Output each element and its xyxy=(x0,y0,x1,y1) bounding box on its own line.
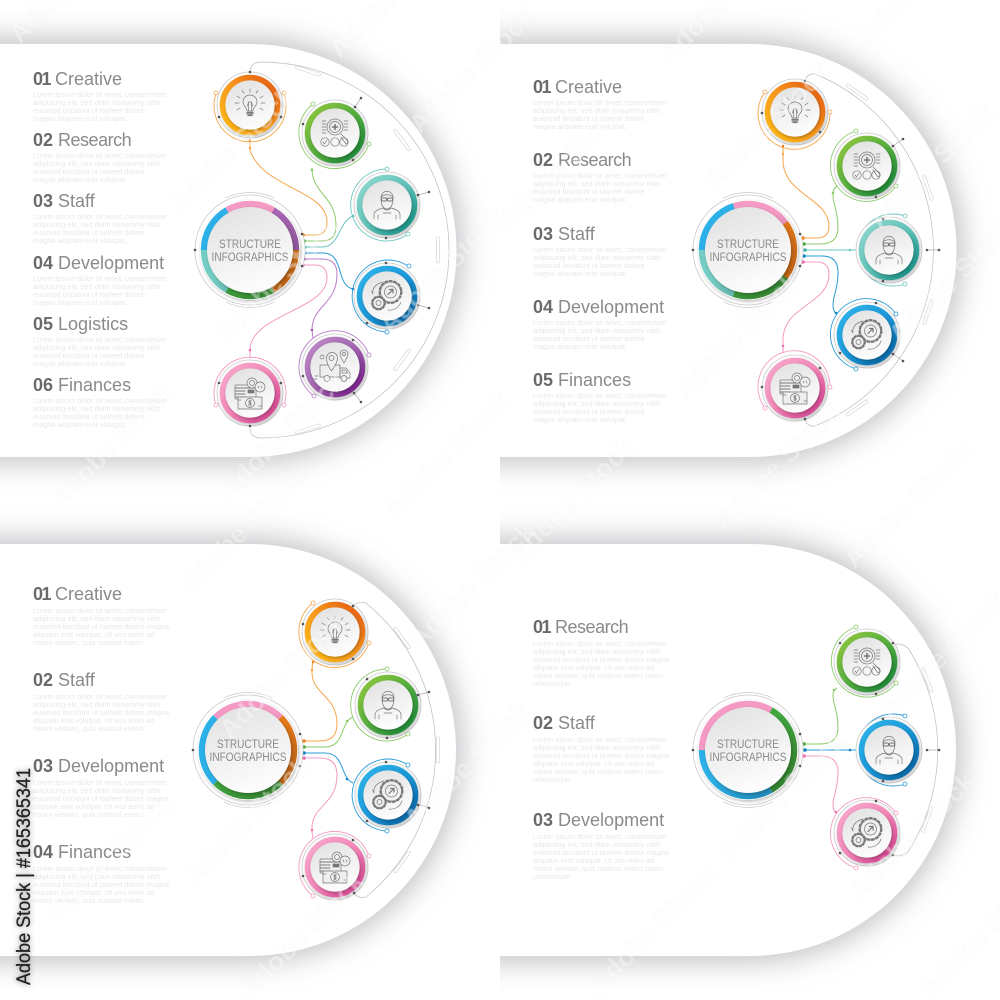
text: 02 Research: euismod tincidunt ut laoreet dolore xyxy=(33,167,145,176)
text: 03 Staff: 03 Staff xyxy=(33,191,96,211)
connector: purple xyxy=(302,257,337,338)
connector: blue xyxy=(803,748,860,752)
watermark: Adobe Stock repeats: Adobe Stock xyxy=(713,726,852,864)
text: 02 Research: adipiscing elit, sed diam nonummy nibh xyxy=(33,159,160,168)
text: 01 Research: euismod tincidunt ut laoreet dolore magna xyxy=(533,655,670,664)
text: 04 Finances: 04 Finances xyxy=(33,842,131,862)
hub: INFOGRAPHICS xyxy=(710,751,786,764)
text: 02 Research xyxy=(33,130,167,184)
text: 06 Finances: magna aliquam erat volutpat. xyxy=(33,420,127,429)
text: 04 Development: euismod tincidunt ut laoreet dolore xyxy=(33,290,145,299)
text: 01 Research: minim veniam, quis nostrud exerci tation xyxy=(533,671,663,680)
connector: green xyxy=(802,688,838,746)
node: Finances xyxy=(214,357,286,427)
hub xyxy=(174,174,326,326)
text: 02 Staff: 02 Staff xyxy=(33,670,96,690)
text: 03 Development xyxy=(33,756,170,819)
connector: blue xyxy=(802,254,838,314)
text: 01 Research: adipiscing elit, sed diam nonummy nibh xyxy=(533,647,660,656)
text: 01 Creative: magna aliquam erat volutpat. xyxy=(33,114,127,123)
outer arc with links xyxy=(805,74,940,426)
text: 05 Finances: magna aliquam erat volutpat. xyxy=(533,415,627,424)
watermark: Adobe Stock repeats: Adobe Stock xyxy=(173,461,312,599)
text: 03 Staff: adipiscing elit, sed diam nonummy nibh xyxy=(533,253,660,262)
text: 02 Staff: Lorem ipsum dolor sit amet, consectetuer xyxy=(533,735,667,744)
text: 05 Logistics: 05 Logistics xyxy=(33,314,128,334)
text: 01 Creative: 01 Creative xyxy=(533,77,622,97)
text: 01 Creative: euismod tincidunt ut laoreet dolore magna xyxy=(33,622,170,631)
text: 01 Creative: 01 Creative xyxy=(33,584,122,604)
text: 01 Creative: adipiscing elit, sed diam nonummy nibh xyxy=(33,98,160,107)
text: 02 Research: Lorem ipsum dolor sit amet, consectetuer xyxy=(33,151,167,160)
text: 03 Staff: Lorem ipsum dolor sit amet, consectetuer xyxy=(533,245,667,254)
connector: pink xyxy=(249,263,327,358)
text: 03 Development: adipiscing elit, sed diam nonummy nibh xyxy=(533,840,660,849)
text: 06 Finances: Lorem ipsum dolor sit amet, consectetuer xyxy=(33,396,167,405)
watermark: Adobe Stock repeats: Adobe Stock xyxy=(493,96,632,234)
panel: five-step infographic xyxy=(533,74,940,426)
text: 05 Logistics xyxy=(33,314,167,368)
text: 04 Development xyxy=(33,253,167,307)
text: 04 Development: magna aliquam erat volutpat. xyxy=(533,342,627,351)
text: 01 Creative xyxy=(533,77,667,131)
text: 01 Creative: euismod tincidunt ut laoreet dolore xyxy=(33,106,145,115)
node: Development xyxy=(352,260,420,334)
text: 02 Research: 02 Research xyxy=(533,150,631,170)
text: 02 Staff: minim veniam, quis nostrud exerci xyxy=(33,724,144,733)
hub: INFOGRAPHICS xyxy=(210,751,286,764)
text: 01 Creative: 01 Creative xyxy=(33,69,122,89)
outer arc with links xyxy=(250,62,449,438)
text: 05 Finances: euismod tincidunt ut laoreet dolore xyxy=(533,407,645,416)
text: 04 Development: Lorem ipsum dolor sit amet, consectetuer xyxy=(33,274,167,283)
watermark: Adobe Stock repeats: Adobe Stock xyxy=(708,396,847,534)
panel background: top-right xyxy=(500,23,977,478)
connector: blue xyxy=(302,751,353,783)
watermark: Adobe Stock repeats: Adobe Stock xyxy=(403,516,542,654)
text: 05 Logistics: magna aliquam erat volutpat. xyxy=(33,359,127,368)
connector: green xyxy=(302,717,353,749)
text: 04 Finances: minim veniam, quis nostrud exerci xyxy=(33,896,144,905)
connector: blue xyxy=(303,251,354,290)
text: 03 Staff: euismod tincidunt ut laoreet dolore xyxy=(533,261,645,270)
text: 03 Development: Lorem ipsum dolor sit amet, consectetuer xyxy=(533,832,667,841)
watermark: Adobe Stock repeats: Adobe Stock xyxy=(38,791,177,929)
panel background: bottom-left xyxy=(0,523,476,977)
text: 04 Development: 04 Development xyxy=(33,253,164,273)
text: 01 Creative: Lorem ipsum dolor sit amet, consectetuer xyxy=(533,98,667,107)
connector: green xyxy=(802,186,838,246)
node: Logistics xyxy=(299,331,371,400)
text: 01 Research: aliquam erat volutpat. Ut wisi enim ad xyxy=(533,663,654,672)
text: 01 Creative: Lorem ipsum dolor sit amet, consectetuer xyxy=(33,606,167,615)
node: Creative xyxy=(299,599,371,668)
outer arc with links xyxy=(893,644,940,856)
text: 02 Staff: euismod tincidunt ut laoreet dolore magna xyxy=(533,751,670,760)
text: 03 Development: minim veniam, quis nostrud exerci tation xyxy=(533,864,663,873)
text: 03 Development: euismod tincidunt ut laoreet dolore magna xyxy=(533,848,670,857)
hub xyxy=(672,174,824,326)
text: 05 Logistics: euismod tincidunt ut laoreet dolore xyxy=(33,351,145,360)
node: Development xyxy=(830,299,900,371)
text: 05 Finances: adipiscing elit, sed diam nonummy nibh xyxy=(533,399,660,408)
watermark: Adobe Stock repeats: Adobe Stock xyxy=(378,386,517,524)
connector: orange xyxy=(782,146,829,240)
connector: green xyxy=(302,168,336,243)
text: 02 Staff: minim veniam, quis nostrud exerci tation xyxy=(533,767,663,776)
text: 04 Finances xyxy=(33,842,170,905)
text: 01 Research: Lorem ipsum dolor sit amet, consectetuer xyxy=(533,639,667,648)
text: 02 Staff: aliquam erat volutpat. Ut wisi enim ad xyxy=(33,716,154,725)
node: Staff xyxy=(856,214,928,286)
text: 02 Research: Lorem ipsum dolor sit amet, consectetuer xyxy=(533,171,667,180)
text: 03 Staff xyxy=(33,191,167,245)
text: 04 Finances: aliquam erat volutpat. Ut wisi enim ad xyxy=(33,888,154,897)
node: Staff xyxy=(351,667,421,741)
text: 02 Research: magna aliquam erat volutpat. xyxy=(533,195,627,204)
text: 02 Research xyxy=(533,150,667,204)
text: 02 Staff: ullamcorper xyxy=(533,775,572,784)
hub: STRUCTURE xyxy=(217,738,279,751)
hub xyxy=(172,674,324,826)
text: 03 Development: aliquam erat volutpat. Ut wisi enim ad xyxy=(33,802,154,811)
text: 04 Finances: Lorem ipsum dolor sit amet, consectetuer xyxy=(33,864,167,873)
watermark: Adobe Stock repeats: Adobe Stock xyxy=(668,266,807,404)
text: 05 Logistics: adipiscing elit, sed diam nonummy nibh xyxy=(33,343,160,352)
panel background: top-left xyxy=(0,23,477,478)
text: 01 Creative: minim veniam, quis nostrud exerci xyxy=(33,638,144,647)
panel: four-step infographic xyxy=(33,584,440,905)
text: 01 Research: ullamcorper xyxy=(533,679,572,688)
text: 03 Development: Lorem ipsum dolor sit amet, consectetuer xyxy=(33,778,167,787)
text: 01 Creative: magna aliquam erat volutpat. xyxy=(533,122,627,131)
text: 01 Creative: adipiscing elit, sed diam nonummy nibh xyxy=(533,106,660,115)
text: 04 Finances: adipiscing elit, sed diam nonummy nibh xyxy=(33,872,160,881)
text: 05 Logistics: Lorem ipsum dolor sit amet, consectetuer xyxy=(33,335,167,344)
node: Development xyxy=(352,759,421,833)
text: 03 Staff: euismod tincidunt ut laoreet dolore xyxy=(33,228,145,237)
hub: STRUCTURE xyxy=(717,238,779,251)
connector: orange xyxy=(302,662,337,743)
watermark: Adobe Stock repeats: Adobe Stock xyxy=(208,211,347,349)
text: 01 Creative xyxy=(33,584,170,647)
hub: INFOGRAPHICS xyxy=(212,251,288,264)
node: Staff xyxy=(856,714,928,786)
node: Finances xyxy=(758,351,832,421)
text: 03 Staff: magna aliquam erat volutpat. xyxy=(33,236,127,245)
text: 01 Creative: euismod tincidunt ut laoreet dolore xyxy=(533,114,645,123)
watermark: Adobe Stock repeats: Adobe Stock xyxy=(178,751,317,889)
text: 02 Research: euismod tincidunt ut laoreet dolore xyxy=(533,187,645,196)
watermark: Adobe Stock repeats: Adobe Stock xyxy=(838,436,977,574)
node: Staff xyxy=(351,167,420,241)
watermark: Adobe Stock repeats: Adobe Stock xyxy=(43,376,182,514)
text: 05 Finances: Lorem ipsum dolor sit amet, consectetuer xyxy=(533,391,667,400)
text: 01 Research xyxy=(533,617,670,688)
text: 02 Research: 02 Research xyxy=(33,130,131,150)
watermark: Adobe Stock repeats: Adobe Stock xyxy=(863,96,1000,234)
watermark: Adobe Stock repeats: Adobe Stock xyxy=(698,56,837,194)
text: 03 Development: minim veniam, quis nostrud exerci xyxy=(33,810,144,819)
text: 02 Staff: euismod tincidunt ut laoreet dolore magna xyxy=(33,708,170,717)
watermark: Adobe Stock repeats: Adobe Stock xyxy=(403,1,542,139)
node: Research xyxy=(831,625,900,697)
text: 03 Staff: Lorem ipsum dolor sit amet, consectetuer xyxy=(33,212,167,221)
text: 06 Finances xyxy=(33,375,167,429)
node: Development xyxy=(830,798,900,870)
text: 06 Finances: 06 Finances xyxy=(33,375,131,395)
text: 06 Finances: adipiscing elit, sed diam nonummy nibh xyxy=(33,404,160,413)
text: 01 Creative: Lorem ipsum dolor sit amet, consectetuer xyxy=(33,90,167,99)
text: 03 Development: 03 Development xyxy=(533,810,664,830)
watermark: Adobe Stock repeats: Adobe Stock xyxy=(373,201,512,339)
hub: STRUCTURE xyxy=(717,738,779,751)
text: 01 Creative xyxy=(33,69,167,123)
text: 04 Development: magna aliquam erat volutpat. xyxy=(33,298,127,307)
text: 04 Development: 04 Development xyxy=(533,297,664,317)
watermark: Adobe Stock repeats: Adobe Stock xyxy=(163,81,302,219)
text: 05 Finances: 05 Finances xyxy=(533,370,631,390)
node: Research xyxy=(830,129,900,201)
watermark: Adobe Stock repeats: Adobe Stock xyxy=(503,431,642,569)
stock id side label: Adobe Stock | #165365341 xyxy=(13,768,35,985)
panel: six-step infographic xyxy=(33,62,449,438)
text: 01 Research: 01 Research xyxy=(533,617,628,637)
connector: pink xyxy=(802,754,838,813)
connector: pink xyxy=(302,756,337,838)
text: 02 Staff: aliquam erat volutpat. Ut wisi enim ad xyxy=(533,759,654,768)
text: 03 Development: adipiscing elit, sed diam nonummy nibh xyxy=(33,786,160,795)
text: 03 Staff xyxy=(533,224,667,278)
text: 02 Staff: Lorem ipsum dolor sit amet, consectetuer xyxy=(33,692,167,701)
outer arc with links xyxy=(353,602,440,898)
node: Creative xyxy=(758,79,832,149)
text: 02 Staff: adipiscing elit, sed diam nonummy nibh xyxy=(33,700,160,709)
text: 04 Development: adipiscing elit, sed diam nonummy nibh xyxy=(33,282,160,291)
text: 02 Research: magna aliquam erat volutpat. xyxy=(33,175,127,184)
node: Research xyxy=(299,100,371,169)
hub: STRUCTURE xyxy=(219,238,281,251)
watermark: Adobe Stock repeats: Adobe Stock xyxy=(213,366,352,504)
watermark: Adobe Stock repeats: Adobe Stock xyxy=(398,696,537,834)
text: 04 Development: Lorem ipsum dolor sit amet, consectetuer xyxy=(533,318,667,327)
text: 06 Finances: euismod tincidunt ut laoreet dolore xyxy=(33,412,145,421)
panel: three-step infographic xyxy=(533,617,940,881)
text: 03 Development: ullamcorper xyxy=(533,872,572,881)
text: 02 Staff: 02 Staff xyxy=(533,713,596,733)
text: 03 Development: 03 Development xyxy=(33,756,164,776)
text: 03 Staff: magna aliquam erat volutpat. xyxy=(533,269,627,278)
text: 02 Staff: adipiscing elit, sed diam nonummy nibh xyxy=(533,743,660,752)
text: 01 Creative: adipiscing elit, sed diam nonummy nibh xyxy=(33,614,160,623)
watermark: Adobe Stock repeats: Adobe Stock xyxy=(843,766,982,904)
hub: INFOGRAPHICS xyxy=(710,251,786,264)
text: 03 Staff: adipiscing elit, sed diam nonummy nibh xyxy=(33,220,160,229)
text: 04 Development: adipiscing elit, sed diam nonummy nibh xyxy=(533,326,660,335)
connector: orange xyxy=(249,140,327,237)
text: 03 Development: aliquam erat volutpat. Ut wisi enim ad xyxy=(533,856,654,865)
connector: pink xyxy=(782,260,829,353)
hub xyxy=(672,674,824,826)
text: 03 Development: euismod tincidunt ut laoreet dolore magna xyxy=(33,794,170,803)
text: 04 Finances: euismod tincidunt ut laoreet dolore magna xyxy=(33,880,170,889)
text: 02 Staff xyxy=(33,670,170,733)
panel background: bottom-right xyxy=(500,523,976,977)
text: 03 Development xyxy=(533,810,670,881)
watermark: Adobe Stock repeats: Adobe Stock xyxy=(213,606,352,744)
text: 02 Research: adipiscing elit, sed diam nonummy nibh xyxy=(533,179,660,188)
text: 02 Staff xyxy=(533,713,670,784)
text: 05 Finances xyxy=(533,370,667,424)
text: 04 Development: euismod tincidunt ut laoreet dolore xyxy=(533,334,645,343)
text: 03 Staff: 03 Staff xyxy=(533,224,596,244)
node: Finances xyxy=(299,831,371,900)
watermark: Adobe Stock repeats: Adobe Stock xyxy=(583,861,722,999)
node: Creative xyxy=(214,71,286,142)
text: 04 Development xyxy=(533,297,667,351)
connector: teal xyxy=(803,248,860,252)
text: 01 Creative: aliquam erat volutpat. Ut wisi enim ad xyxy=(33,630,154,639)
connector: teal xyxy=(303,215,354,249)
